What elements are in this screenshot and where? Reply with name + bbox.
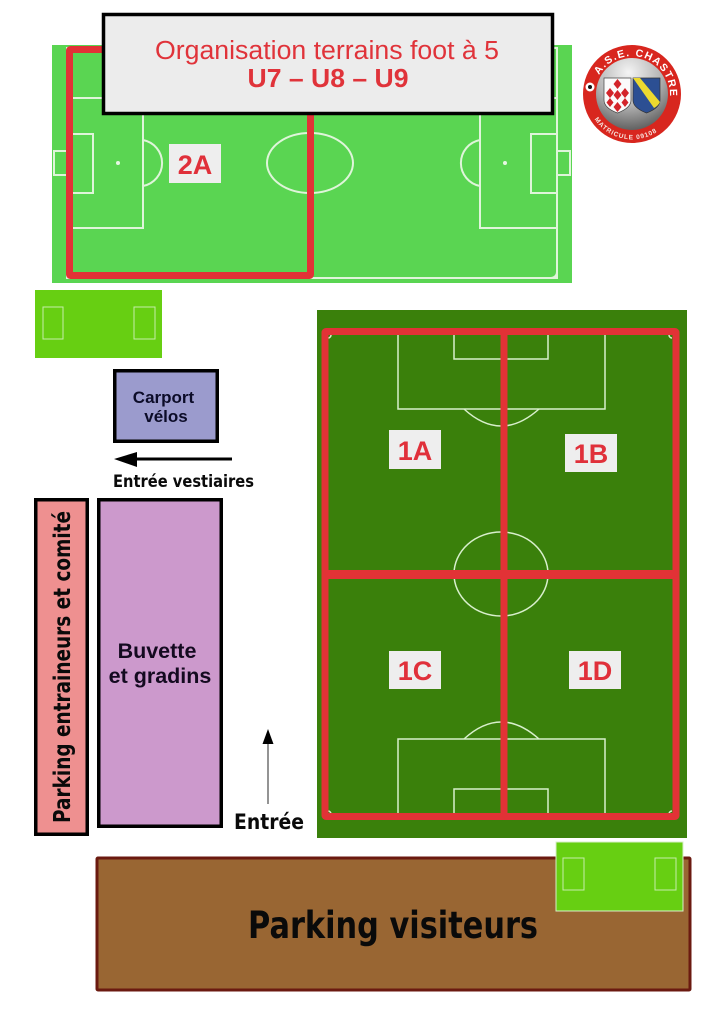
- arrow: vers vestiaires: [114, 452, 232, 467]
- arrow: entrée: [262, 729, 274, 804]
- label 1A: [389, 430, 441, 469]
- label 2A: [169, 144, 221, 183]
- buvette et gradins: [99, 500, 221, 826]
- label 2A: 2A: [178, 150, 212, 180]
- label 1C: 1C: [398, 656, 432, 686]
- parking visiteurs: [97, 858, 690, 990]
- logo: A.S.E. Chastre crest: [583, 45, 681, 143]
- parking visiteurs: Parking visiteurs: [248, 904, 538, 947]
- buvette et gradins: et gradins: [109, 664, 211, 688]
- title box: [104, 14, 552, 114]
- small pitch: bottom right: [556, 842, 683, 911]
- logo: A.S.E. Chastre crest: A.S.E. CHASTRE: [594, 50, 678, 96]
- label 1B: [565, 434, 617, 472]
- small pitch: top left: [35, 290, 162, 358]
- label 1B: 1B: [574, 439, 608, 469]
- label 1D: [569, 651, 621, 689]
- title box: U7 – U8 – U9: [248, 65, 408, 93]
- carport vélos: Carport: [133, 388, 195, 407]
- panel: upper pitch (terrain 2): [52, 45, 572, 283]
- label 1D: 1D: [578, 656, 612, 686]
- zones 1A 1B 1C 1D red grid: [325, 332, 676, 816]
- buvette et gradins: Buvette: [118, 639, 196, 663]
- label: Entrée: Entrée: [234, 810, 304, 834]
- parking entraineurs et comité: [36, 500, 87, 834]
- zone 2A red outline: [70, 50, 310, 276]
- title box: Organisation terrains foot à 5: [155, 37, 499, 65]
- label 1A: 1A: [398, 436, 432, 466]
- carport vélos: [115, 371, 217, 441]
- panel: main pitch (terrain 1): [317, 310, 687, 838]
- parking entraineurs et comité: Parking entraineurs et comité: [50, 511, 76, 823]
- carport vélos: vélos: [144, 407, 188, 426]
- label 1C: [389, 651, 441, 689]
- label: Entrée vestiaires: Entrée vestiaires: [113, 472, 254, 492]
- logo: A.S.E. Chastre crest: MATRICULE 09108: [594, 116, 656, 140]
